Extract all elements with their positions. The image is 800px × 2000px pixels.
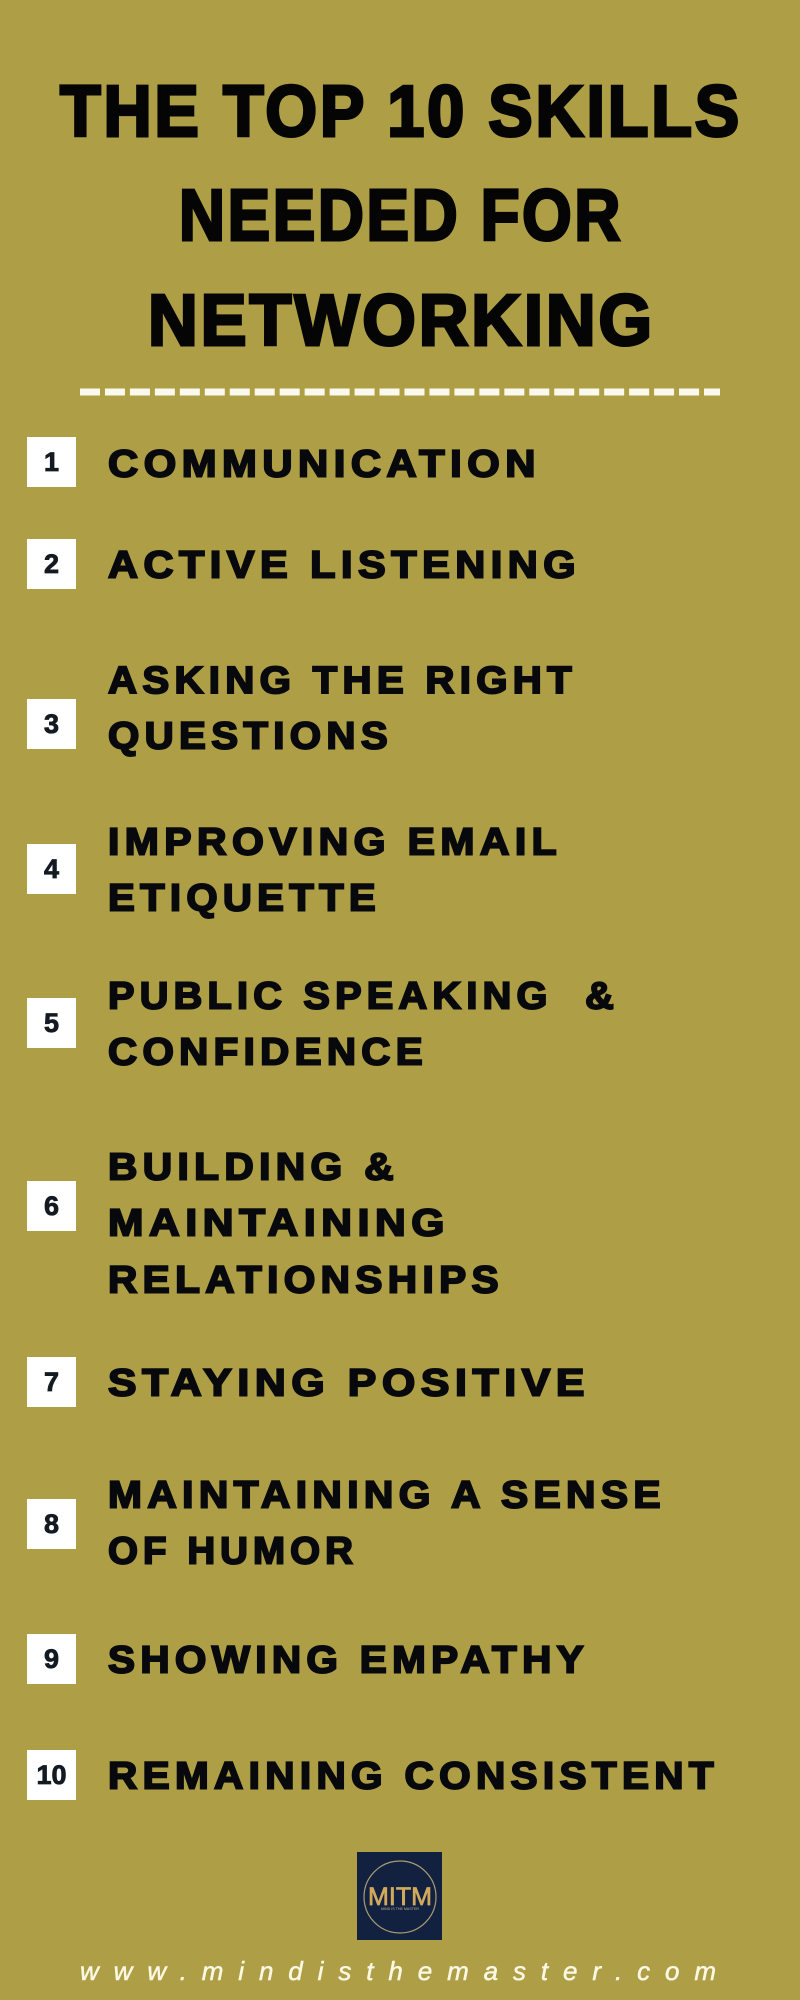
list of skills <box>27 437 719 1800</box>
item 5: public speaking and confidence: PUBLIC SPEAKING & <box>108 976 619 1018</box>
item 4: improving email etiquette <box>27 822 562 920</box>
item 6: building and maintaining relationships: MAINTAINING <box>108 1202 450 1244</box>
logo: MITM: MIND IS THE MASTER <box>381 1906 419 1911</box>
item 10: remaining consistent <box>27 1750 719 1800</box>
item 6: building and maintaining relationships: 6 <box>44 1191 59 1221</box>
title: NEEDED FOR <box>179 176 623 256</box>
website url: www.mindisthemaster.com <box>80 1956 716 1986</box>
item 8: maintaining a sense of humor: 8 <box>44 1509 59 1539</box>
item 7: staying positive: 7 <box>44 1367 59 1397</box>
item 1: communication: COMMUNICATION <box>108 444 541 486</box>
item 3: asking the right questions: 3 <box>44 709 59 739</box>
item 8: maintaining a sense of humor: OF HUMOR <box>108 1530 358 1572</box>
item 9: showing empathy <box>27 1634 589 1684</box>
item 8: maintaining a sense of humor: MAINTAINING A SENSE <box>108 1474 666 1516</box>
item 9: showing empathy: SHOWING EMPATHY <box>108 1640 589 1682</box>
item 4: improving email etiquette: IMPROVING EMAIL <box>108 822 562 864</box>
item 10: remaining consistent: 10 <box>36 1760 67 1790</box>
item 1: communication <box>27 437 541 487</box>
item 2: active listening: ACTIVE LISTENING <box>108 544 581 586</box>
item 1: communication: 1 <box>44 447 59 477</box>
logo: MITM <box>357 1852 442 1940</box>
item 5: public speaking and confidence <box>27 976 619 1074</box>
item 6: building and maintaining relationships: BUILDING & <box>108 1146 399 1188</box>
title <box>60 72 742 361</box>
item 6: building and maintaining relationships: RELATIONSHIPS <box>108 1260 504 1302</box>
item 4: improving email etiquette: 4 <box>44 854 59 884</box>
item 3: asking the right questions: ASKING THE RIGHT <box>108 660 577 702</box>
item 5: public speaking and confidence: CONFIDENCE <box>108 1032 428 1074</box>
item 7: staying positive <box>27 1357 590 1407</box>
item 10: remaining consistent: REMAINING CONSISTENT <box>108 1756 719 1798</box>
item 8: maintaining a sense of humor <box>27 1474 666 1572</box>
item 5: public speaking and confidence: 5 <box>44 1008 59 1038</box>
item 2: active listening: 2 <box>44 549 59 579</box>
item 3: asking the right questions <box>27 660 577 758</box>
item 7: staying positive: STAYING POSITIVE <box>108 1362 590 1404</box>
logo: MITM: MITM <box>368 1883 432 1911</box>
item 9: showing empathy: 9 <box>44 1644 59 1674</box>
title: NETWORKING <box>148 281 655 361</box>
item 3: asking the right questions: QUESTIONS <box>108 716 393 758</box>
title: THE TOP 10 SKILLS <box>60 72 742 152</box>
item 2: active listening <box>27 539 581 589</box>
item 4: improving email etiquette: ETIQUETTE <box>108 878 381 920</box>
item 6: building and maintaining relationships <box>27 1146 504 1302</box>
